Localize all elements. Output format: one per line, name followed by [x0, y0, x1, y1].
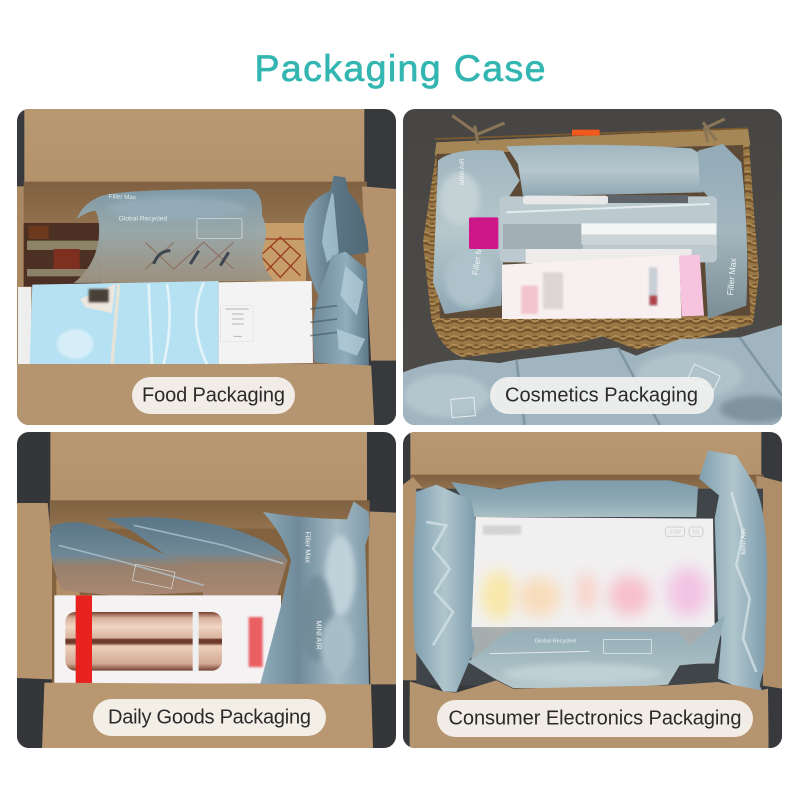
front air bag — [468, 615, 725, 689]
lattice card — [255, 223, 306, 282]
basket — [423, 116, 759, 357]
air bag with print — [74, 189, 274, 283]
rear roll air bag — [105, 517, 288, 596]
air bag with print: Global Recycled — [119, 216, 167, 223]
panel: cosmetics packaging: Filler Max — [470, 237, 485, 276]
cosmetic box — [502, 255, 704, 319]
front roll air bag — [50, 522, 209, 596]
phone box — [471, 517, 715, 664]
panel: food packaging — [17, 109, 396, 425]
upright air bag — [260, 501, 370, 686]
mug box — [54, 595, 281, 684]
side air bags — [304, 176, 369, 374]
label: food packaging — [132, 377, 295, 414]
label: cosmetics packaging — [490, 377, 714, 414]
phone box: 33W — [669, 530, 681, 536]
panel: consumer electronics packaging — [403, 432, 782, 748]
panel: cosmetics packaging — [403, 109, 793, 425]
blue printed box — [18, 281, 219, 364]
phone box: 5G — [692, 530, 700, 536]
label: consumer electronics packaging — [437, 700, 753, 737]
panel: daily goods packaging — [17, 432, 396, 748]
panel: cosmetics packaging: Filler Max — [725, 257, 738, 296]
right air bag: MINI AIR — [741, 528, 748, 555]
upright air bag: MINI AIR — [314, 620, 323, 650]
panel: cosmetics packaging: MINI AIR — [459, 158, 466, 185]
air bag with print: Filler Max — [109, 193, 137, 201]
patterned book — [24, 223, 102, 286]
label: daily goods packaging: Daily Goods Packaging — [108, 706, 311, 728]
right air bag — [698, 144, 747, 319]
white box — [219, 281, 313, 364]
rear air bag — [506, 145, 710, 196]
label: consumer electronics packaging: Consumer Electronics Packaging — [448, 708, 742, 730]
phone box: Redmi — [484, 526, 515, 537]
label: daily goods packaging — [93, 699, 326, 736]
label: cosmetics packaging: Cosmetics Packaging — [505, 384, 698, 406]
bottle — [469, 195, 717, 262]
right air bag — [699, 450, 767, 699]
left air bag — [413, 485, 476, 692]
upright air bag: Filler Max — [304, 531, 313, 563]
left air bag — [433, 150, 520, 314]
rear air bag — [451, 480, 698, 517]
title: Packaging Case — [254, 47, 546, 89]
label: food packaging: Food Packaging — [142, 384, 285, 406]
front air bag: Global Recycled — [535, 639, 576, 645]
card behind box — [526, 249, 692, 263]
front air bags — [403, 325, 793, 425]
